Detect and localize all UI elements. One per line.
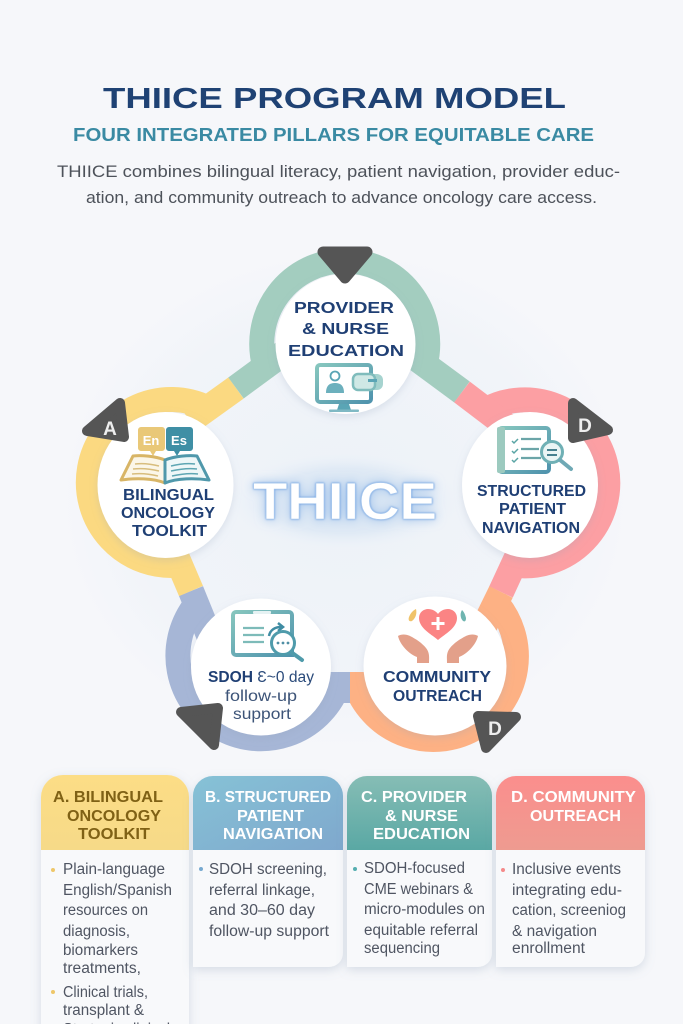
card C list: SDOH-focused (364, 860, 465, 877)
icon: monitor with person (317, 365, 383, 412)
marker: D lower: D (488, 719, 502, 740)
card D list: cation, screeniog (512, 902, 626, 919)
card B: structured patient navigation (193, 776, 343, 967)
arc: bilingual (88, 399, 208, 565)
card C: provider and nurse education (347, 776, 492, 967)
card B list (199, 861, 330, 940)
card A header (41, 775, 189, 850)
card A list: resources on (63, 902, 148, 919)
node: provider and nurse education (276, 252, 416, 414)
node text: ONCOLOGY (121, 505, 215, 522)
card C header (347, 776, 492, 850)
node text (121, 487, 215, 540)
node text (288, 300, 404, 360)
node text: SDOH Ɛ~0 day (208, 669, 314, 686)
node: structured patient navigation (462, 403, 608, 558)
card A list: transplant & (63, 1002, 145, 1019)
node text: STRUCTURED (477, 483, 586, 500)
card D list: integrating edu- (512, 882, 622, 899)
card A list: Plain-language (63, 861, 165, 878)
card C list (353, 860, 485, 957)
intro paragraph: ation, and community outreach to advance oncology care access. (86, 188, 597, 207)
node text: PROVIDER (294, 300, 395, 317)
card B list: referral linkage, (209, 882, 315, 899)
center label THIICE: THIICE (253, 473, 437, 531)
card A: bilingual oncology toolkit (41, 775, 189, 1024)
card D list: Inclusive events (512, 861, 621, 878)
card B list: follow-up support (209, 923, 330, 940)
node text: EDUCATION (288, 343, 404, 360)
icon: hands holding heart (398, 609, 478, 663)
icon: open book with language bubbles: En (143, 433, 159, 448)
node text: support (233, 706, 292, 723)
node text (383, 669, 491, 705)
node text: TOOLKIT (132, 523, 207, 540)
card A list: English/Spanish (63, 882, 172, 899)
card C list: micro-modules on (364, 901, 485, 918)
arc: navigation (485, 400, 608, 566)
card D header: D. COMMUNITY (511, 789, 636, 806)
card C list: equitable referral (364, 922, 478, 939)
intro paragraph: THIICE combines bilingual literacy, patient navigation, provider educ- (57, 162, 620, 181)
arc: provider (262, 261, 428, 367)
arc: SDOH (178, 604, 338, 739)
node text: NAVIGATION (482, 520, 580, 537)
card B header: PATIENT (237, 808, 304, 825)
node text: PATIENT (499, 501, 566, 518)
connector segments (165, 350, 525, 688)
node text: BILINGUAL (123, 487, 214, 504)
marker: D upper (573, 403, 608, 438)
card D list: enrollment (512, 940, 586, 957)
icon: checklist with magnifier (497, 427, 571, 473)
card A list: Clinical trials, (63, 984, 148, 1001)
center label THIICE (227, 451, 463, 551)
node text: follow-up (225, 688, 297, 705)
marker: lower left triangle (181, 708, 218, 745)
cycle diagram: arcs and connectors (88, 261, 608, 739)
intro paragraph (57, 162, 620, 207)
card B header: NAVIGATION (223, 826, 323, 843)
card A header: TOOLKIT (78, 826, 150, 843)
node: SDOH follow-up support (181, 598, 331, 745)
node text (477, 483, 586, 537)
card A list: diagnosis, (63, 923, 130, 940)
card D list (501, 861, 626, 957)
marker: D upper: D (578, 416, 592, 437)
card D header: OUTREACH (530, 808, 621, 825)
card A list: treatments, (63, 960, 141, 977)
card C header: C. PROVIDER (361, 789, 467, 806)
card C list: CME webinars & (364, 881, 474, 898)
marker: D lower (478, 716, 516, 748)
node text: & NURSE (302, 321, 389, 338)
icon: clipboard with magnifier (233, 611, 302, 660)
card A header: A. BILINGUAL (53, 789, 163, 806)
node text (208, 669, 314, 723)
icon: open book with language bubbles (121, 427, 209, 483)
icon: open book with language bubbles: Es (171, 433, 187, 448)
card C header: EDUCATION (373, 826, 470, 843)
card B list: and 30–60 day (209, 902, 315, 919)
node text: OUTREACH (393, 688, 482, 705)
card D: community outreach (496, 776, 645, 967)
arc: community (356, 602, 516, 739)
title: THIICE PROGRAM MODEL (103, 83, 566, 115)
card A list (51, 861, 172, 1024)
card D header (496, 776, 645, 850)
marker: A (87, 403, 124, 440)
card B header (193, 776, 343, 850)
marker: A: A (103, 419, 117, 440)
node: community outreach (364, 596, 516, 748)
card C list: sequencing (364, 940, 440, 957)
node: bilingual oncology toolkit (87, 403, 234, 558)
node text: COMMUNITY (383, 669, 491, 686)
card A list: biomarkers (63, 942, 138, 959)
subtitle: FOUR INTEGRATED PILLARS FOR EQUITABLE CARE (73, 125, 594, 145)
card D list: & navigation (512, 923, 597, 940)
card C header: & NURSE (385, 808, 458, 825)
marker: top triangle (323, 252, 367, 278)
card B header: B. STRUCTURED (205, 789, 331, 806)
card A header: ONCOLOGY (67, 808, 161, 825)
card B list: SDOH screening, (209, 861, 327, 878)
